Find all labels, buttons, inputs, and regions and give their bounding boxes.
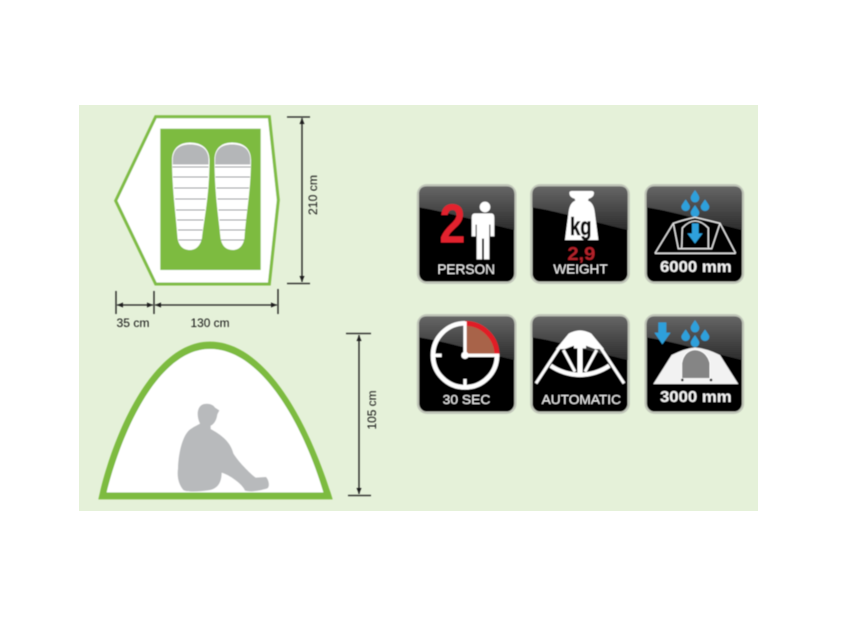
dimension: 210 cm: 210 cm: [308, 175, 320, 215]
dimension: 130 cm: 130 cm: [190, 318, 230, 330]
icon: automatic frame: [531, 315, 629, 413]
sleeping bag right: [214, 142, 251, 250]
seated person: [178, 404, 269, 492]
icon: 6000 mm waterproof: [646, 185, 743, 283]
icon: weight: 2,9: [567, 243, 595, 264]
icon row 2: [418, 315, 743, 413]
icon: automatic frame: AUTOMATIC: [542, 393, 621, 407]
icon: weight: kg: [570, 214, 592, 241]
icon: 2 person: [418, 185, 515, 283]
dimension: 210 cm: [287, 117, 320, 284]
icon: weight: [531, 185, 629, 283]
dimension: 35 cm: 35 cm: [116, 318, 150, 330]
icon: 3000 mm waterproof: [646, 315, 743, 413]
icon: 30 sec clock: 30 SEC: [443, 392, 491, 407]
tent outline: [116, 117, 278, 284]
dimension: 35 cm: [116, 291, 154, 330]
icon row 1: [418, 185, 743, 283]
sleeping bag left: [172, 142, 210, 250]
icon: 2 person: 2: [439, 193, 465, 255]
dimension: 130 cm: [155, 289, 278, 330]
icon: 6000 mm waterproof: 6000 mm: [660, 259, 732, 276]
dimension: 105 cm: 105 cm: [367, 390, 379, 430]
dome interior: [107, 349, 323, 492]
inner floor: [160, 129, 261, 270]
icon: 30 sec clock: [418, 315, 515, 413]
background panel: [79, 105, 758, 511]
icon: 2 person: PERSON: [437, 262, 495, 277]
icon: 3000 mm waterproof: 3000 mm: [660, 389, 732, 406]
dome outline: [98, 342, 333, 499]
icon: weight: WEIGHT: [553, 262, 608, 277]
dimension: 105 cm: [346, 334, 379, 496]
tent side view: [98, 342, 333, 499]
tent floor plan: [116, 117, 278, 284]
